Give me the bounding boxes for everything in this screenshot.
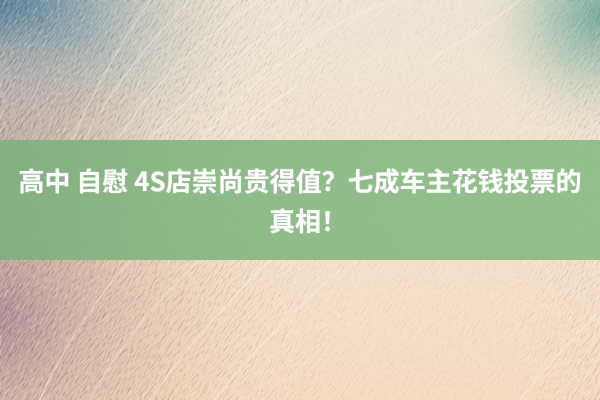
green title band	[0, 140, 600, 260]
title: 高中 自慰 4S店崇尚贵得值？七成车主花钱投票的	[18, 162, 582, 199]
title: 真相！	[269, 202, 347, 239]
title	[18, 162, 582, 239]
